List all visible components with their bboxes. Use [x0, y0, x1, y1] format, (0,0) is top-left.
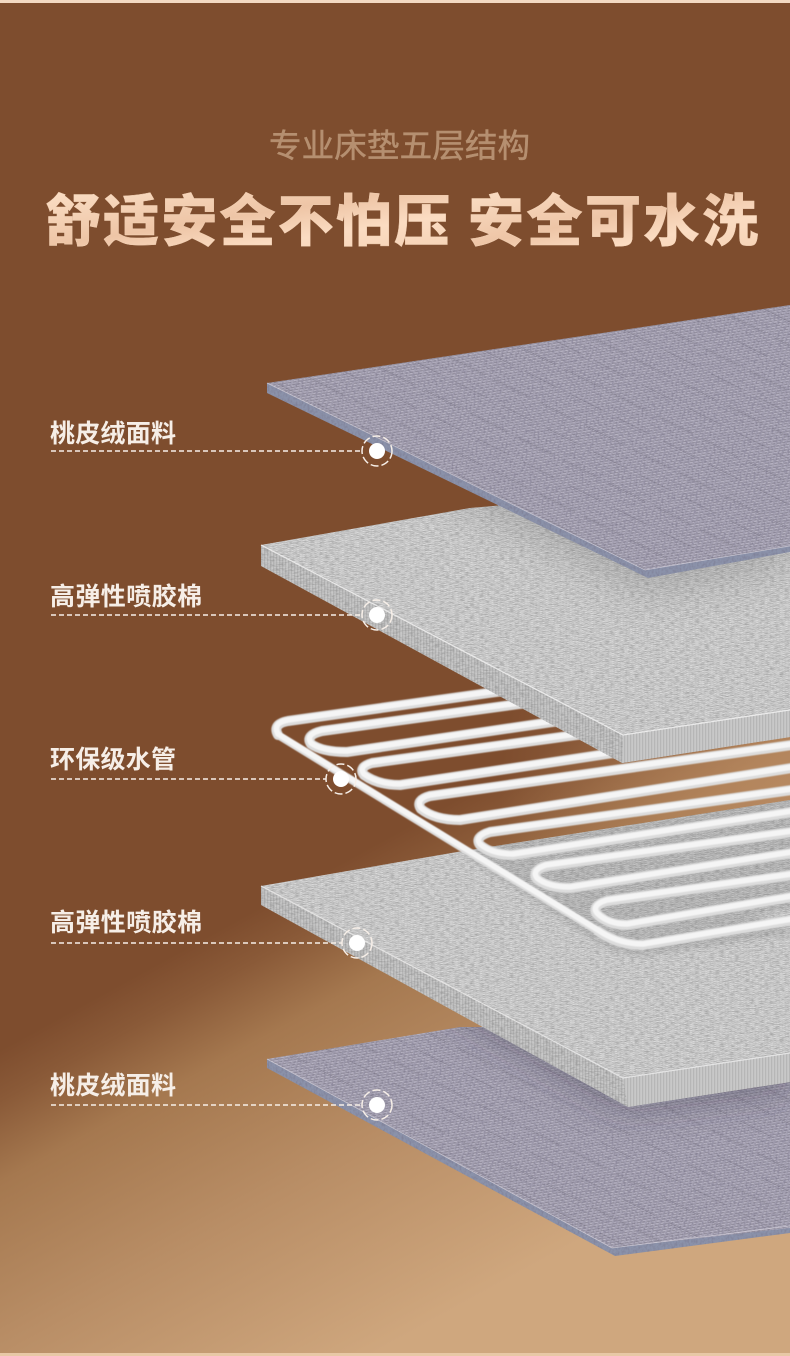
layer 3: water pipes [276, 682, 790, 945]
layer 2: upper spray-bonded cotton [260, 505, 790, 763]
layer 1: top peach-fleece fabric [267, 305, 790, 578]
callout: water pipe label: 环保级水管 [50, 746, 176, 774]
title [45, 190, 758, 253]
subtitle: 专业床垫五层结构 [269, 128, 530, 164]
callout: upper cotton label: 高弹性喷胶棉 [50, 583, 202, 611]
callout: water pipe label [50, 746, 356, 794]
title: 安全可水洗 [468, 190, 758, 253]
layer 4: lower spray-bonded cotton [260, 800, 790, 1107]
title: 舒适安全不怕压 [45, 190, 450, 253]
callout: bottom fabric label: 桃皮绒面料 [50, 1072, 176, 1100]
callout: top fabric label [50, 420, 392, 466]
layer 5: bottom peach-fleece fabric [266, 1027, 790, 1256]
callout: lower cotton label [50, 909, 372, 958]
callout: bottom fabric label [50, 1072, 392, 1120]
callout: top fabric label: 桃皮绒面料 [50, 420, 176, 448]
callout: upper cotton label [50, 583, 392, 630]
callout: lower cotton label: 高弹性喷胶棉 [50, 909, 202, 937]
